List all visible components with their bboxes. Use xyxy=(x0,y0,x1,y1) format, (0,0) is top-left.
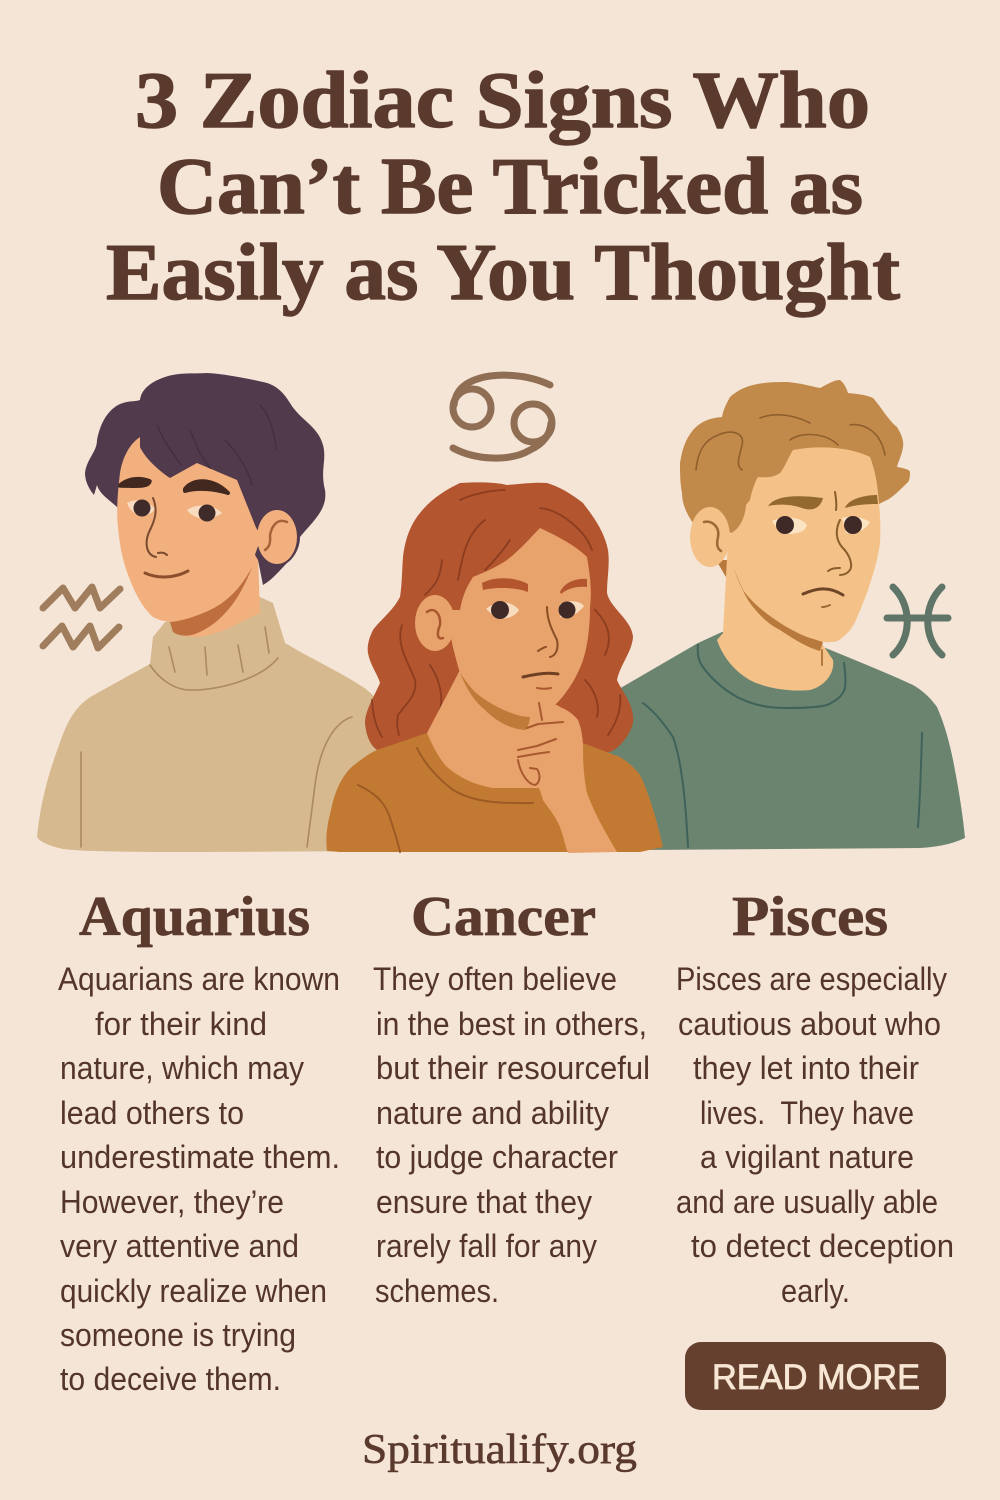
body text: lives. They have xyxy=(700,1095,914,1131)
hair fringe lines xyxy=(157,405,276,485)
face xyxy=(727,447,880,642)
figure: Pisces man xyxy=(600,380,965,850)
button: read more: READ MORE xyxy=(712,1358,920,1397)
sweater details xyxy=(81,627,352,847)
column: Cancer xyxy=(373,886,650,1309)
ear xyxy=(415,595,455,651)
body text: nature, which may xyxy=(60,1050,304,1086)
body text: for their kind xyxy=(95,1006,267,1042)
body text: someone is trying xyxy=(60,1317,296,1353)
neck shadow xyxy=(170,567,252,636)
column: Aquarius xyxy=(58,886,340,1397)
body text: schemes. xyxy=(375,1273,499,1309)
face xyxy=(446,528,591,717)
body text: Aquarians are known xyxy=(58,961,340,997)
eyes xyxy=(486,602,519,619)
neck shadow xyxy=(460,673,530,730)
icon: pisces symbol xyxy=(887,587,948,655)
body text: to detect deception xyxy=(691,1228,954,1264)
shirt details xyxy=(358,748,533,852)
shirt xyxy=(600,632,965,850)
title: Easily as You Thought xyxy=(106,229,900,317)
body text xyxy=(58,961,340,1397)
button: read more xyxy=(685,1342,946,1410)
icon: cancer symbol xyxy=(453,375,552,458)
body text: and are usually able xyxy=(676,1184,938,1220)
arm and hand xyxy=(517,703,617,853)
body text: a vigilant nature xyxy=(700,1139,914,1175)
back hair xyxy=(716,560,730,584)
body text: early. xyxy=(781,1273,850,1309)
shirt details xyxy=(643,645,922,847)
heading: Pisces xyxy=(732,886,888,948)
eyes xyxy=(772,518,807,534)
hair xyxy=(365,482,633,752)
icon: aquarius symbol xyxy=(43,587,120,648)
body text: nature and ability xyxy=(376,1095,609,1131)
figure: Aquarius man xyxy=(37,373,378,852)
eyebrows xyxy=(482,578,528,592)
body text xyxy=(676,961,954,1309)
neck shadow xyxy=(733,567,823,651)
nose and mouth xyxy=(147,498,167,557)
body text: rarely fall for any xyxy=(376,1228,597,1264)
nose and mouth xyxy=(828,492,851,575)
ear xyxy=(690,507,730,567)
body text: cautious about who xyxy=(678,1006,941,1042)
hair strands xyxy=(696,415,885,470)
heading: Cancer xyxy=(411,886,596,948)
eyebrows xyxy=(768,496,823,509)
hair xyxy=(85,373,325,585)
neck xyxy=(168,555,260,637)
body text: to judge character xyxy=(376,1139,618,1175)
finger lines xyxy=(518,703,563,785)
body text: in the best in others, xyxy=(376,1006,647,1042)
figure: Cancer woman xyxy=(326,482,663,853)
title xyxy=(106,57,900,317)
body text: to deceive them. xyxy=(60,1361,281,1397)
neck xyxy=(717,540,833,690)
ear xyxy=(257,510,297,564)
body text: quickly realize when xyxy=(60,1273,327,1309)
body text: ensure that they xyxy=(376,1184,592,1220)
title: 3 Zodiac Signs Who xyxy=(135,57,870,145)
body text: Pisces are especially xyxy=(676,961,947,997)
body text: However, they’re xyxy=(60,1184,284,1220)
body text: very attentive and xyxy=(60,1228,299,1264)
eyes xyxy=(127,500,155,516)
nose and mouth xyxy=(538,607,558,657)
body text: lead others to xyxy=(60,1095,244,1131)
body text: they let into their xyxy=(693,1050,919,1086)
heading: Aquarius xyxy=(79,886,310,948)
eyebrows xyxy=(120,479,150,486)
sweater xyxy=(37,597,378,852)
body text: underestimate them. xyxy=(60,1139,340,1175)
shirt xyxy=(326,733,663,852)
body text: but their resourceful xyxy=(376,1050,650,1086)
column: Pisces xyxy=(676,886,954,1309)
hair strands xyxy=(372,490,620,737)
body text xyxy=(373,961,650,1309)
footer: website: Spiritualify.org xyxy=(362,1427,637,1473)
face xyxy=(117,437,262,622)
hair xyxy=(680,380,910,533)
neck xyxy=(427,670,575,788)
title: Can’t Be Tricked as xyxy=(157,143,863,231)
body text: They often believe xyxy=(373,961,617,997)
